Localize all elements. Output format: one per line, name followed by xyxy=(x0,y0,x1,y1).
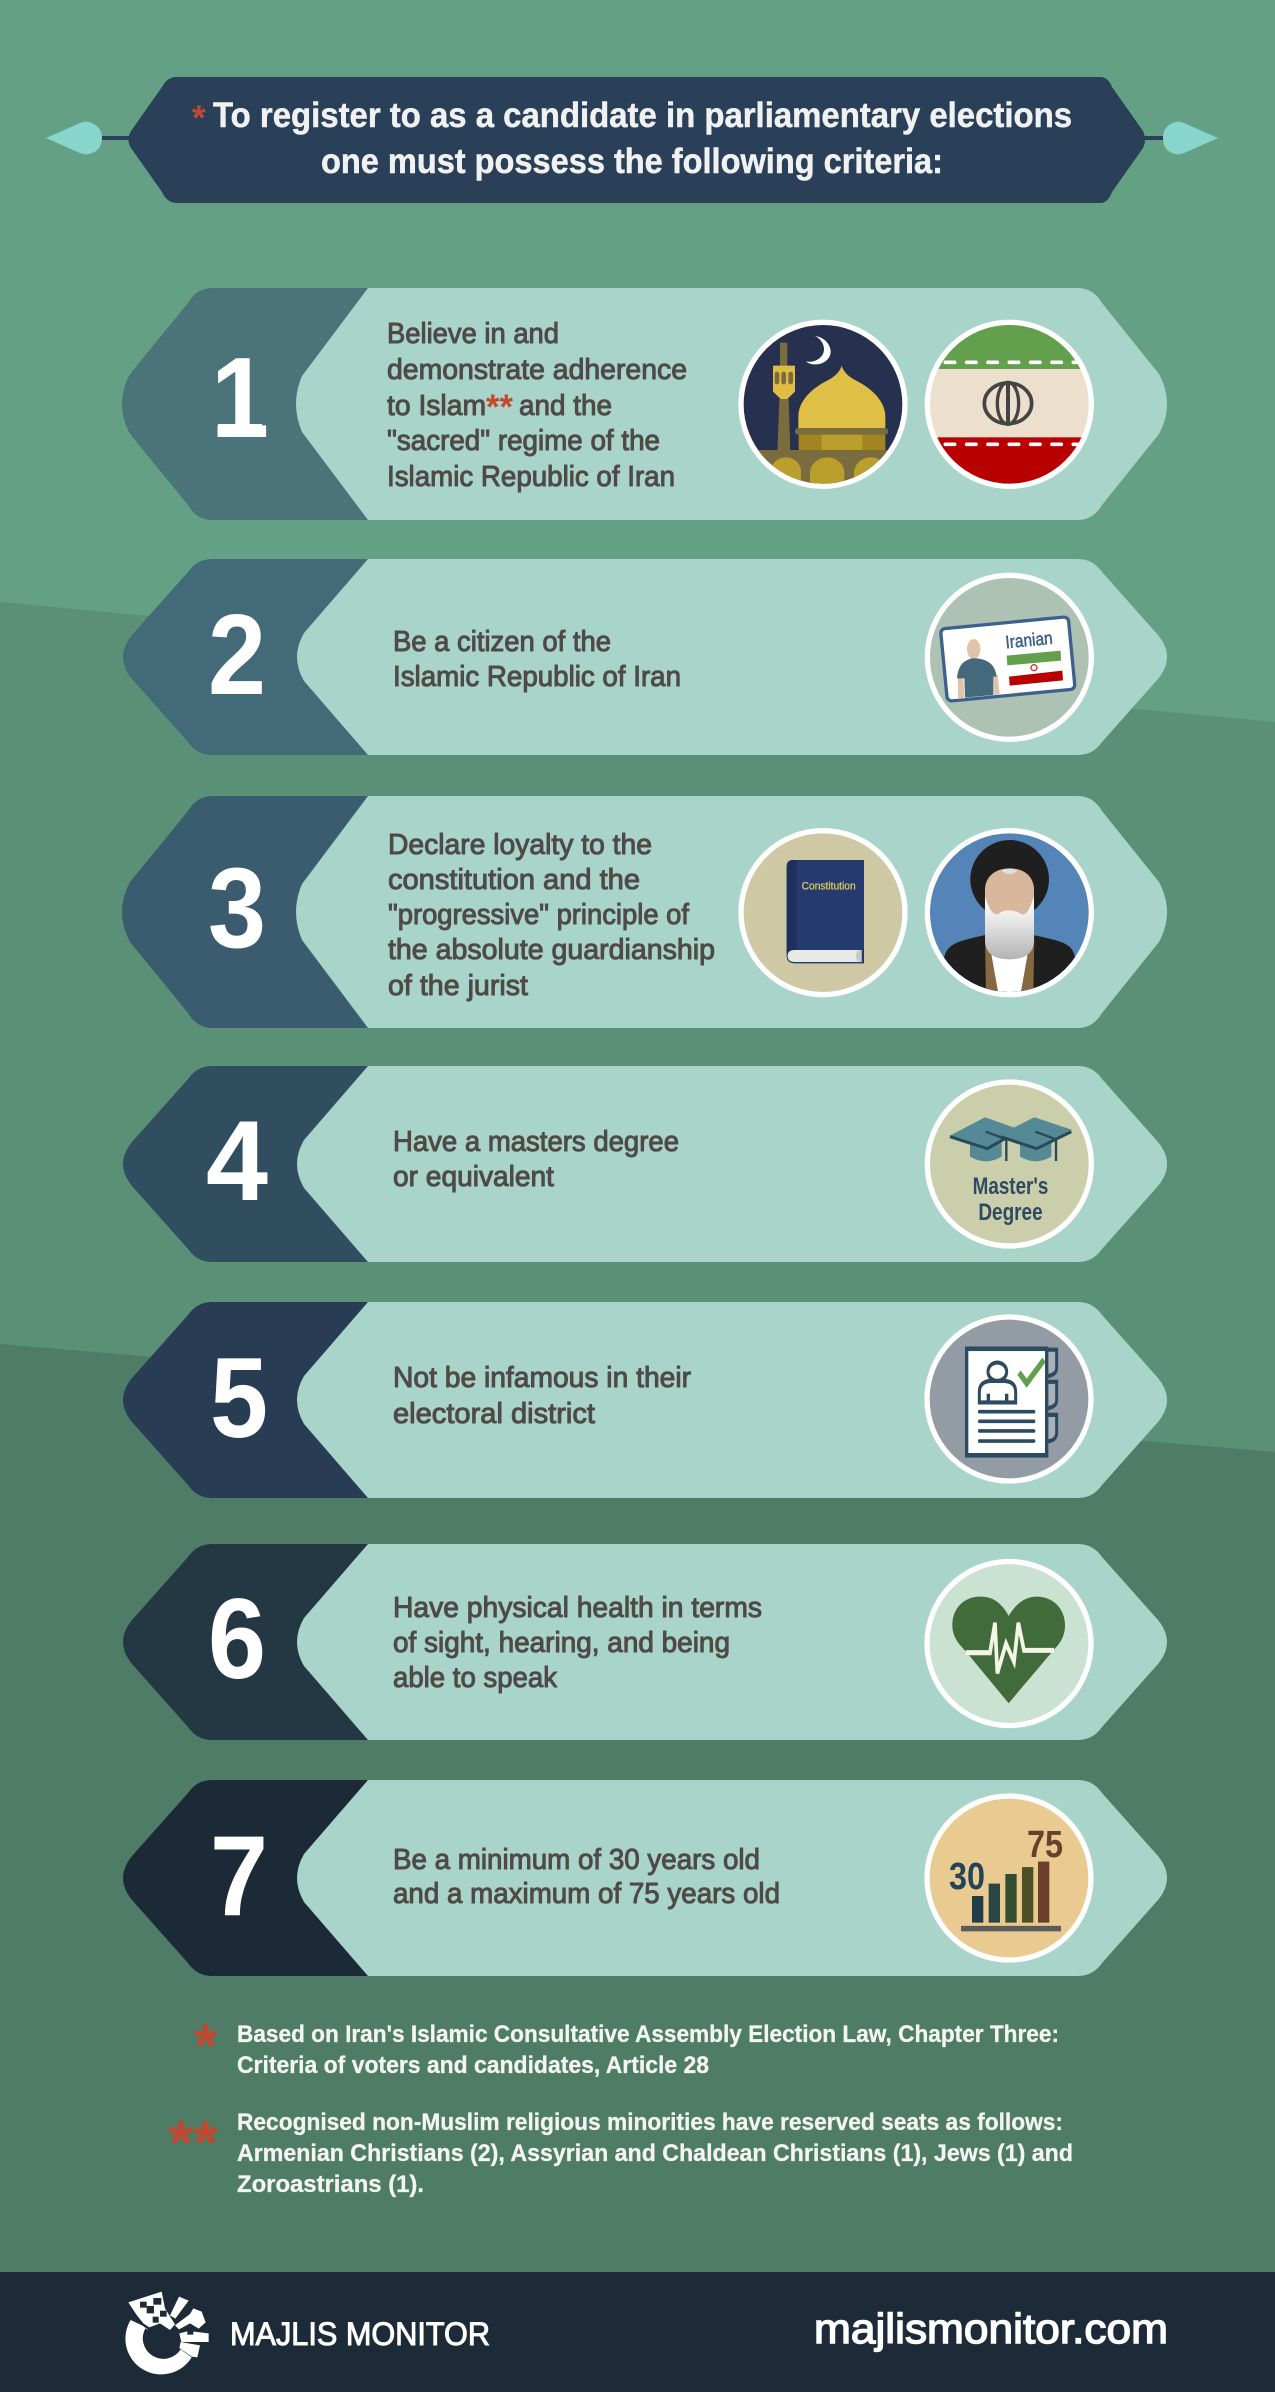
footnote 2: Recognised non-Muslim religious minorities have reserved seats as follows: xyxy=(237,2109,1063,2136)
text: criterion 3 xyxy=(388,829,715,1002)
number badge 7 xyxy=(123,1780,368,1976)
banner heading: * xyxy=(192,99,206,138)
text: criterion 2: Be a citizen of the xyxy=(393,626,611,658)
icon: age bar chart: 30 xyxy=(949,1856,985,1898)
number badge 3 xyxy=(122,796,368,1028)
card body 6 xyxy=(297,1544,1167,1740)
logo wordmark: MAJLIS MONITOR xyxy=(230,2316,490,2352)
text: criterion 7 xyxy=(393,1844,780,1910)
card body 4 xyxy=(297,1066,1167,1262)
banner shape xyxy=(128,77,1145,203)
panel: criterion 7 xyxy=(123,1780,1167,1976)
text: criterion 1: Islamic Republic of Iran xyxy=(387,461,675,493)
footnote 1: * xyxy=(194,2012,218,2079)
text: criterion 5 xyxy=(393,1362,691,1430)
panel: criterion 4 xyxy=(123,1066,1167,1262)
icon: age bar chart: 75 xyxy=(1027,1824,1063,1866)
footnote 1: Based on Iran's Islamic Consultative Assembly Election Law, Chapter Three: xyxy=(237,2021,1059,2048)
icon: graduation caps: Degree xyxy=(978,1199,1043,1226)
text: criterion 1 xyxy=(387,318,687,493)
number 7: 7 xyxy=(210,1813,268,1940)
card body 2 xyxy=(297,559,1167,755)
card body 1 xyxy=(296,288,1167,520)
text: criterion 4 xyxy=(393,1126,679,1193)
footnote 2 xyxy=(168,2109,1073,2198)
icon: graduation caps: Master's xyxy=(973,1173,1048,1200)
text: criterion 1: Believe in and xyxy=(387,318,559,350)
icon: ID card xyxy=(927,575,1091,739)
logo mark xyxy=(125,2292,209,2374)
text: criterion 1: ** xyxy=(486,388,513,427)
text: criterion 5: Not be infamous in their xyxy=(393,1362,691,1394)
footer xyxy=(0,2272,1275,2392)
panel: criterion 1 xyxy=(122,288,1167,520)
text: criterion 7: and a maximum of 75 years old xyxy=(393,1878,780,1910)
number badge 6 xyxy=(123,1544,368,1740)
text: criterion 6: Have physical health in terms xyxy=(393,1592,762,1624)
footnote 1 xyxy=(194,2012,1059,2079)
icon: constitution book: Constitution xyxy=(802,880,856,892)
text: criterion 1: demonstrate adherence xyxy=(387,354,687,386)
card body 5 xyxy=(297,1302,1167,1498)
footnote 2: Armenian Christians (2), Assyrian and Chaldean Christians (1), Jews (1) and xyxy=(237,2140,1073,2167)
text: criterion 1: "sacred" regime of the xyxy=(387,425,660,457)
number 3: 3 xyxy=(208,845,266,972)
icon: ID card: Iranian xyxy=(1004,628,1053,652)
text: criterion 1: to Islam xyxy=(387,390,486,422)
text: criterion 7: Be a minimum of 30 years old xyxy=(393,1844,760,1876)
text: criterion 1: and the xyxy=(519,390,612,422)
number 5: 5 xyxy=(210,1335,268,1462)
panel: criterion 3 xyxy=(122,796,1167,1028)
number 2: 2 xyxy=(208,592,266,719)
text: criterion 3: "progressive" principle of xyxy=(388,899,690,931)
text: criterion 2: Islamic Republic of Iran xyxy=(393,661,681,693)
text: criterion 2 xyxy=(393,626,681,693)
number 1: 1 xyxy=(211,335,269,462)
number 4: 4 xyxy=(206,1098,268,1225)
icon: Iranian flag xyxy=(927,322,1093,487)
card body 3 xyxy=(296,796,1167,1028)
title banner xyxy=(46,77,1218,203)
ornament: right xyxy=(1144,122,1218,154)
footnote 2: ** xyxy=(168,2109,219,2176)
ornament: left xyxy=(46,122,130,154)
icon: cleric portrait xyxy=(927,831,1091,997)
icon: mosque xyxy=(741,322,905,487)
text: criterion 3: the absolute guardianship xyxy=(388,934,715,966)
text: criterion 6: of sight, hearing, and being xyxy=(393,1627,730,1659)
text: criterion 3: constitution and the xyxy=(388,864,640,896)
panel: criterion 2 xyxy=(123,559,1167,755)
number badge 5 xyxy=(123,1302,368,1498)
footnote 2: Zoroastrians (1). xyxy=(237,2171,424,2198)
icon: candidate document xyxy=(927,1317,1091,1481)
text: criterion 6 xyxy=(393,1592,762,1694)
banner heading xyxy=(192,96,1072,181)
text: criterion 6: able to speak xyxy=(393,1662,557,1694)
text: criterion 4: Have a masters degree xyxy=(393,1126,679,1158)
card body 7 xyxy=(297,1780,1167,1976)
banner heading: To register to as a candidate in parliamentary elections xyxy=(213,96,1072,135)
panel: criterion 5 xyxy=(123,1302,1167,1498)
icon: graduation caps xyxy=(927,1082,1091,1246)
text: criterion 3: of the jurist xyxy=(388,970,528,1002)
number badge 1 xyxy=(122,288,368,520)
icon: heart with pulse xyxy=(927,1562,1091,1726)
panel: criterion 6 xyxy=(123,1544,1167,1740)
number badge 2 xyxy=(123,559,368,755)
icon: constitution book xyxy=(741,831,905,995)
website: majlismonitor.com xyxy=(814,2305,1168,2352)
icon: age bar chart xyxy=(927,1796,1091,1960)
banner heading: one must possess the following criteria: xyxy=(321,142,943,181)
footnote 1: Criteria of voters and candidates, Article 28 xyxy=(237,2052,709,2079)
number badge 4 xyxy=(123,1066,368,1262)
text: criterion 4: or equivalent xyxy=(393,1161,554,1193)
number 6: 6 xyxy=(208,1576,266,1703)
text: criterion 5: electoral district xyxy=(393,1398,595,1430)
text: criterion 3: Declare loyalty to the xyxy=(388,829,652,861)
